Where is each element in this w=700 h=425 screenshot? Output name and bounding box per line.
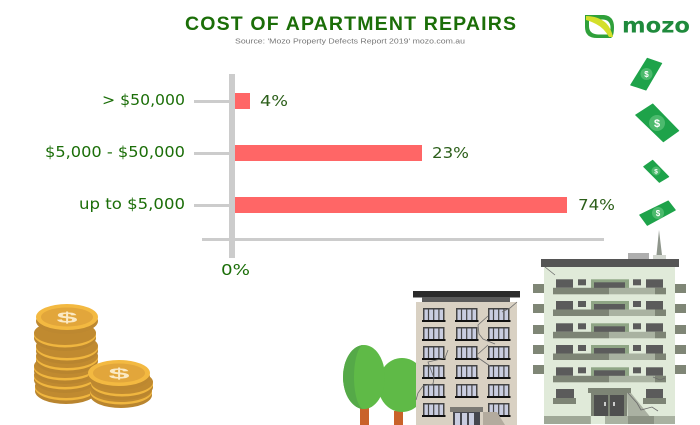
cracks	[545, 267, 665, 411]
icon: dollar sign: $	[56, 310, 79, 326]
roof	[541, 230, 679, 267]
bar: up to $5,000	[79, 195, 615, 214]
icon: banknote 3	[644, 160, 669, 182]
logo wordmark: mozo	[622, 14, 690, 38]
ground floor	[544, 388, 675, 424]
bar: up to $5,000: up to $5,000	[79, 195, 185, 213]
bar: $5,000 - $50,000: 23%	[432, 144, 469, 162]
icon: dollar sign small: $	[108, 366, 131, 382]
logo: mozo	[585, 14, 690, 38]
icon: banknote 4	[640, 201, 675, 225]
axis label 0%: 0%	[221, 261, 250, 279]
bar: over $50,000: > $50,000	[102, 91, 185, 109]
axis lines	[194, 74, 604, 258]
bar: $5,000 - $50,000: $5,000 - $50,000	[45, 143, 185, 161]
side balconies	[533, 284, 686, 374]
icon: banknote 2	[636, 104, 679, 142]
bar chart	[45, 74, 615, 279]
windows	[422, 308, 510, 417]
icon: banknote 2: $	[654, 118, 660, 130]
floors	[553, 279, 666, 382]
building: cracked mid-rise	[413, 291, 520, 425]
entrance	[450, 407, 505, 425]
icon: coin stacks	[34, 304, 153, 408]
icon: banknote 1	[631, 58, 662, 90]
title: COST OF APARTMENT REPAIRS	[185, 13, 516, 35]
bar: up to $5,000: 74%	[578, 196, 615, 214]
building: large apartment block	[533, 230, 686, 424]
icon: falling banknotes	[631, 58, 679, 225]
bar: over $50,000: 4%	[260, 92, 288, 110]
icon: banknote 1: $	[644, 70, 649, 79]
bar: over $50,000	[102, 91, 288, 110]
icon: trees	[343, 345, 426, 425]
source line: Source: 'Mozo Property Defects Report 2019' mozo.com.au	[235, 36, 465, 46]
icon: leaf	[585, 15, 614, 38]
cracks	[416, 302, 517, 400]
icon: banknote 4: $	[656, 209, 661, 218]
bar: $5,000 - $50,000	[45, 143, 469, 162]
icon: banknote 3: $	[654, 168, 658, 176]
